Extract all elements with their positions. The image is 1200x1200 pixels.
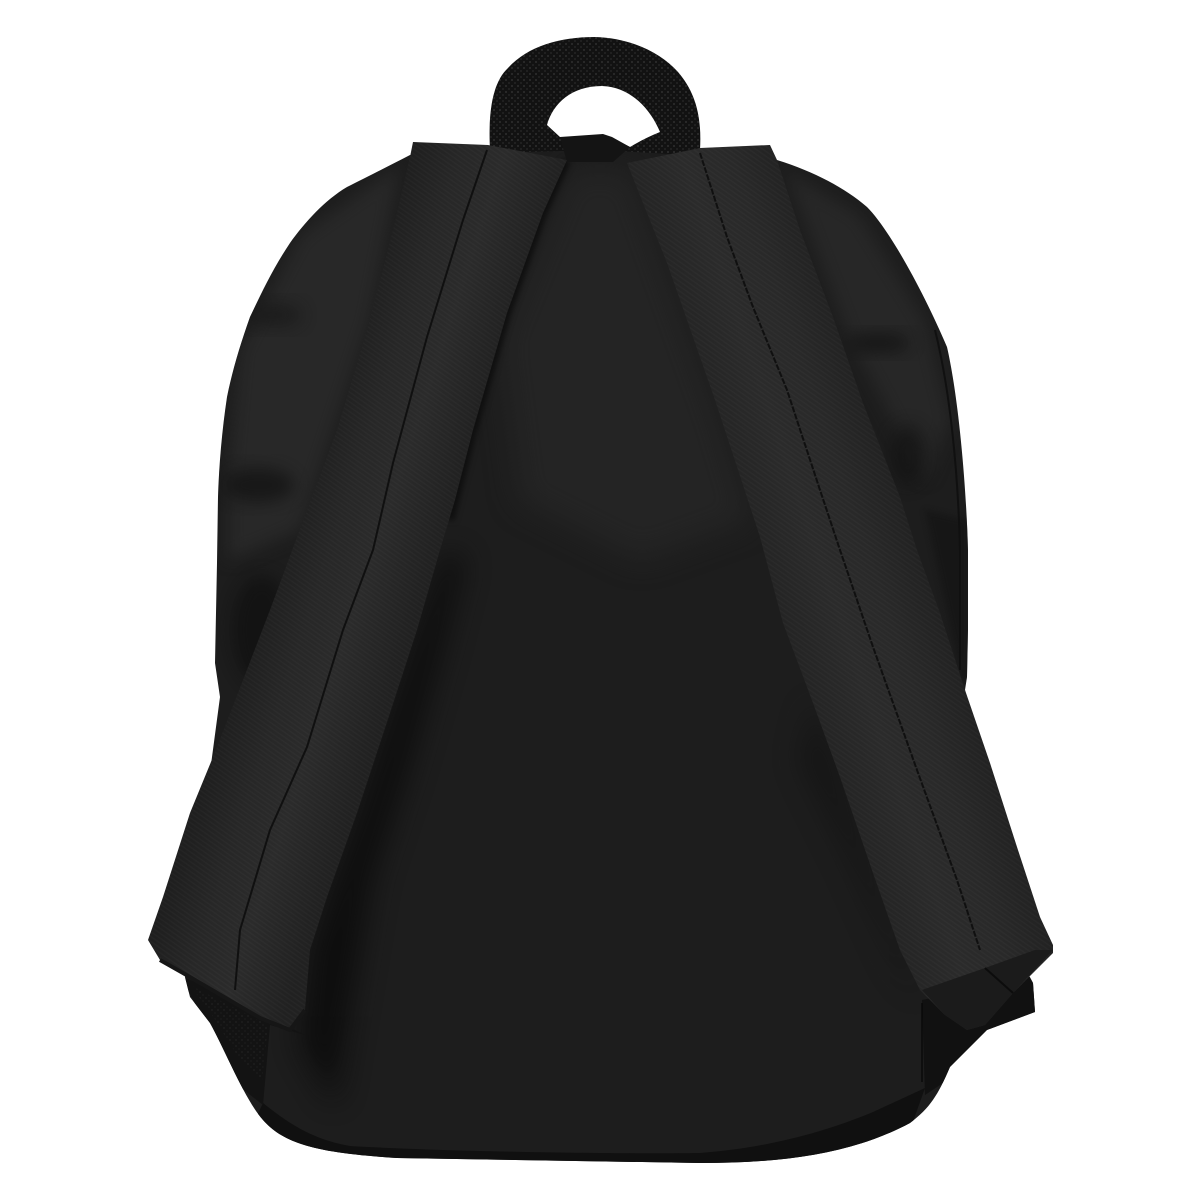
right side panel tone <box>806 196 940 440</box>
centre panel tone <box>500 170 750 560</box>
body fold blotches <box>222 468 294 502</box>
bottom panel fold <box>255 1088 925 1170</box>
illustration: black backpack rear view <box>148 37 1053 1163</box>
right strap stitch seam <box>700 153 980 950</box>
left strap shadow <box>302 567 458 1079</box>
bag body <box>180 150 1040 1170</box>
left strap tip hem <box>160 960 305 1030</box>
collar under handle <box>560 134 630 162</box>
right shoulder strap <box>627 145 1053 1030</box>
left shoulder strap <box>148 142 567 1030</box>
left strap stitch seam <box>235 150 487 990</box>
right panel seam <box>921 1003 923 1082</box>
left side mesh pocket <box>185 978 272 1104</box>
right strap tip fold <box>922 950 1053 1030</box>
body right zipper seam <box>935 330 960 670</box>
right strap shadow <box>800 700 920 1000</box>
left side panel tone <box>230 168 388 548</box>
handle loop <box>490 37 700 162</box>
right side lower panel <box>922 975 1040 1095</box>
